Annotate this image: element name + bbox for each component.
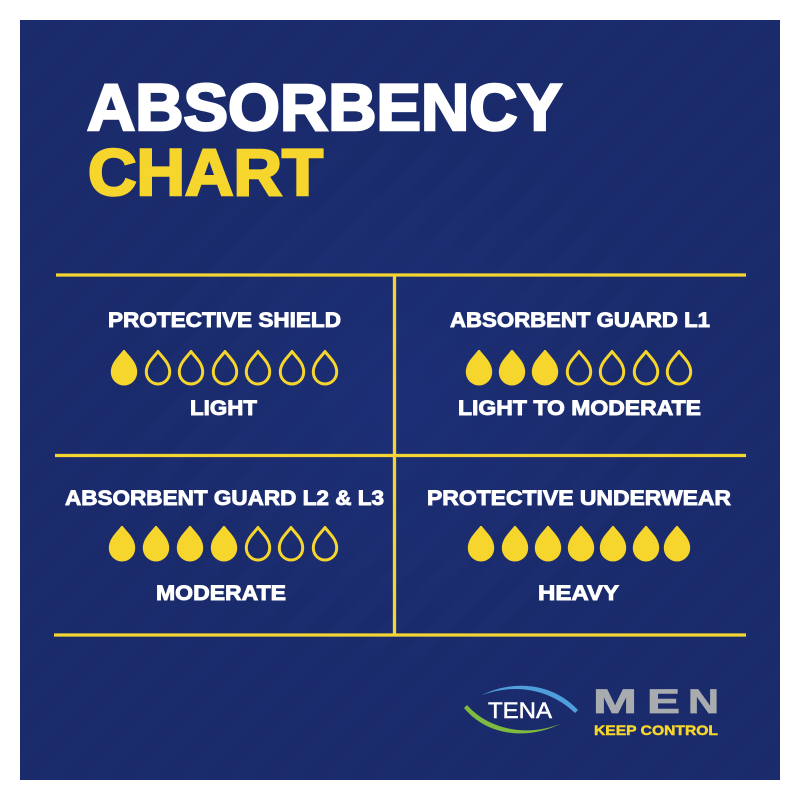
absorbency level: heavy: HEAVY <box>538 581 619 605</box>
drop rating: 7 of 7 <box>469 528 689 560</box>
product name: protective shield: PROTECTIVE SHIELD <box>108 308 341 332</box>
panel: protective underwear <box>427 486 731 605</box>
panel: absorbent guard L2 and L3 <box>65 486 384 605</box>
TENA wordmark: TENA <box>488 698 552 723</box>
panel: protective shield <box>108 308 341 420</box>
absorbency level: moderate: MODERATE <box>156 581 286 605</box>
drop rating: 4 of 7 <box>110 528 337 560</box>
logo: TENA Men Keep Control <box>464 683 719 738</box>
product name: protective underwear: PROTECTIVE UNDERWEAR <box>427 486 731 510</box>
title: ABSORBENCY <box>87 70 562 144</box>
product name: absorbent guard L1: ABSORBENT GUARD L1 <box>450 308 710 332</box>
panel: absorbent guard L1 <box>450 308 710 420</box>
product name: absorbent guard L2 and L3: ABSORBENT GUARD L2 & L3 <box>65 486 384 510</box>
title: CHART <box>88 135 323 209</box>
drop rating: 3 of 7 <box>467 352 691 384</box>
drop rating: 1 of 7 <box>112 352 337 384</box>
MEN wordmark: N <box>688 683 719 721</box>
absorbency level: light to moderate: LIGHT TO MODERATE <box>458 396 701 420</box>
MEN wordmark: E <box>647 683 680 721</box>
tagline: keep control: KEEP CONTROL <box>594 722 718 738</box>
absorbency level: light: LIGHT <box>190 396 257 420</box>
chart grid lines <box>54 275 746 635</box>
title <box>87 70 562 209</box>
icon: TENA swoosh <box>464 686 578 733</box>
MEN wordmark <box>593 683 719 721</box>
MEN wordmark: M <box>593 683 637 721</box>
